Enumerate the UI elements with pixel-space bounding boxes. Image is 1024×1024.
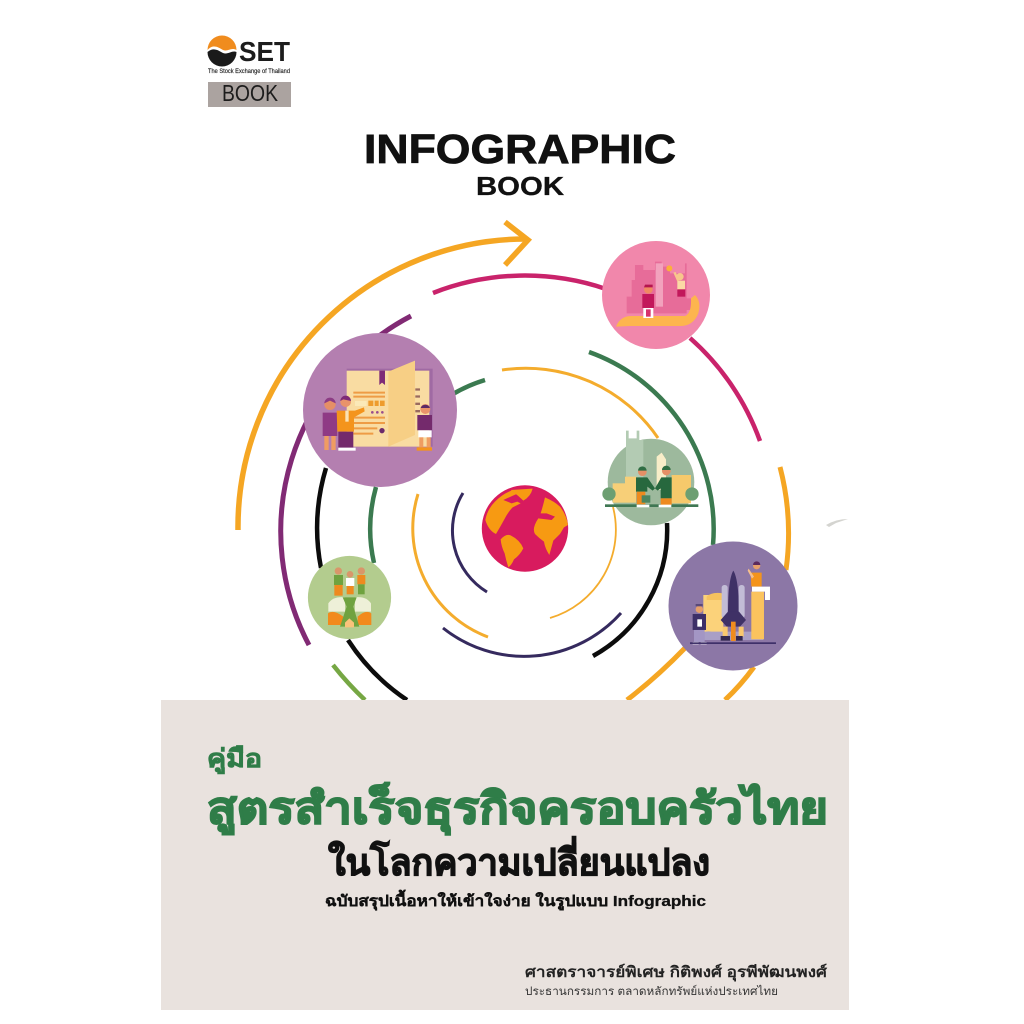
title: INFOGRAPHIC [364,126,676,172]
arc: green orbit [370,352,714,563]
smudge [826,519,848,527]
globe: Americas and Africa land [485,489,568,567]
icon: family and houses [308,556,391,639]
text: author name: ศาสตราจารย์พิเศษ กิติพงศ์ อุรพีพัฒนพงศ์ [525,963,828,982]
arc: crimson orbit [433,276,760,441]
arc: right orange orbit [627,467,789,700]
icon: globe [482,485,568,572]
rocket [721,571,746,641]
arc: black orbit [317,468,667,700]
person: child [417,404,432,451]
arc: thin yellow orbit [550,507,616,618]
icon: sage handshake city [602,431,699,525]
title: BOOK [476,171,564,201]
person: sitting man [748,561,770,600]
arc: navy orbits [443,493,621,656]
person: presenter [337,396,365,451]
heading: main Thai title: สูตรสำเร็จธุรกิจครอบครัวไทย [207,782,828,836]
person: woman [323,398,337,450]
icon: pink city runners [602,241,710,349]
icon: lavender rocket [668,542,798,670]
arc: yellow orbits [413,368,658,637]
logo: SET: SET [239,36,290,67]
heading: Thai subtitle: ในโลกความเปลี่ยนแปลง [328,836,710,883]
icon: book and readers [303,333,457,487]
arc: light green orbit [333,665,365,700]
logo: SET: The Stock Exchange of Thailand [208,68,290,75]
heading: handbook label: คู่มือ [207,745,262,775]
orbit arcs [238,222,789,700]
label: BOOK tag: BOOK [222,80,279,106]
houses [328,597,371,627]
text: author role: ประธานกรรมการ ตลาดหลักทรัพย์แห่งประเทศไทย [525,984,778,998]
arc: orange arrow orbit [238,222,528,530]
person: right businessman [655,466,672,507]
person: jumper [673,272,685,297]
text: summary line: ฉบับสรุปเนื้อหาให้เข้าใจง่าย ในรูปแบบ Infographic [325,889,706,911]
people: three family members [334,567,365,596]
person: man holding paper [693,604,707,644]
title [364,126,676,201]
arc: purple orbit [281,316,411,645]
person: walker with tablet [642,285,654,318]
person: left businessman [636,466,655,507]
panel: beige title band [161,700,849,1010]
logo: SET [208,36,290,75]
